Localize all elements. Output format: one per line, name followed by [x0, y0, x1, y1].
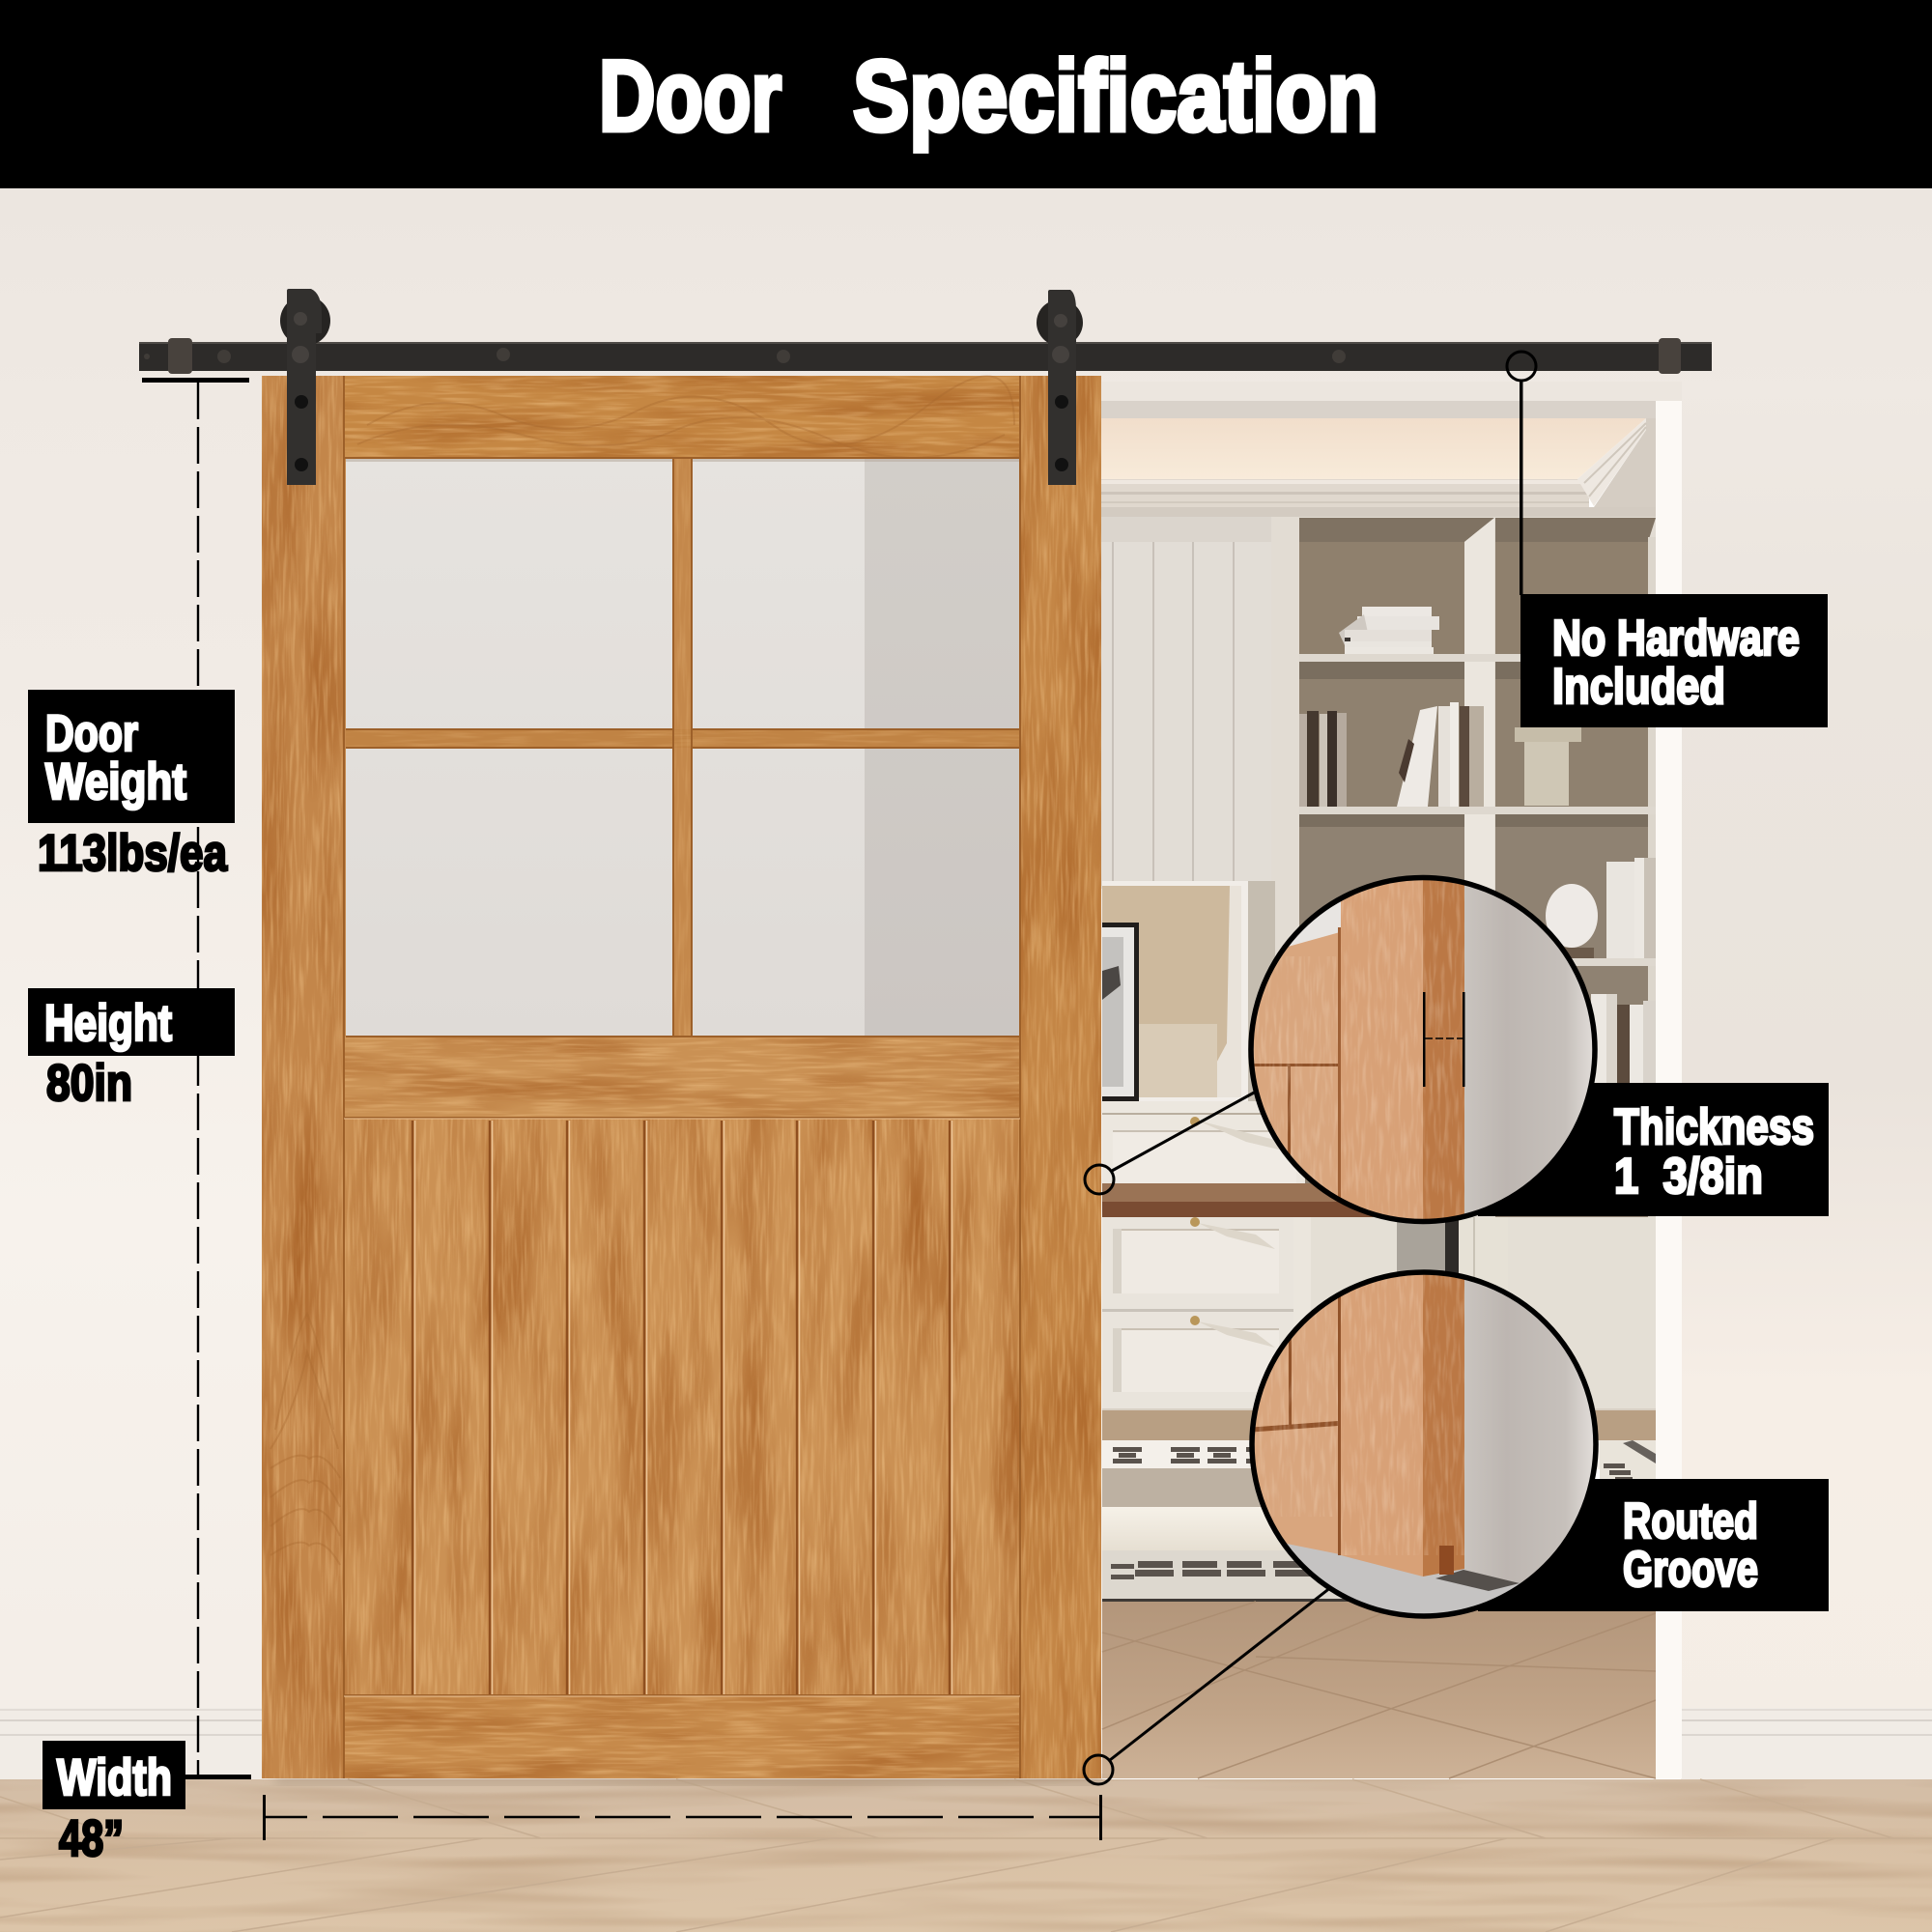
ceiling cove light: [1101, 418, 1646, 479]
small black frame: [1102, 923, 1139, 1101]
plank panels: [344, 1118, 1020, 1695]
thickness marks: [1423, 992, 1464, 1087]
leader: groove: [1084, 1587, 1331, 1784]
title text: Specification: [853, 41, 1378, 153]
label box: routed groove: [1478, 1479, 1829, 1611]
top rail: [344, 376, 1020, 458]
room seen through opening: [1101, 398, 1656, 1778]
label: door weight: Door: [45, 705, 138, 762]
wood floor: [0, 1779, 1932, 1932]
middle rail: [344, 1037, 1020, 1118]
label: height: Height: [44, 995, 172, 1052]
label: door weight: Weight: [45, 753, 186, 810]
title text: [599, 41, 1378, 153]
panelled wall: [1101, 517, 1275, 889]
bottom rail: [344, 1695, 1020, 1778]
label: no hardware included: Included: [1552, 659, 1725, 715]
right wall panels: [1293, 1217, 1656, 1410]
wooden desk top: [1102, 1183, 1373, 1217]
label: no hardware included: No Hardware: [1552, 611, 1800, 667]
left hanger strap: [280, 289, 330, 485]
barn door: [262, 376, 1101, 1784]
rail bolts: [144, 348, 1346, 363]
sliding track rail: [139, 338, 1712, 374]
header soffit: [1101, 398, 1656, 419]
label: width: [43, 1741, 185, 1809]
leader: thickness: [1085, 1092, 1256, 1194]
label text: routed groove: Routed: [1623, 1493, 1758, 1549]
label text: thickness: [1614, 1099, 1814, 1205]
shadow beside framed art: [1248, 881, 1275, 1101]
books and decor: [1299, 607, 1656, 1083]
label: width: Width: [57, 1749, 172, 1806]
value: door weight: 113lbs/ea: [38, 825, 227, 882]
right hanger strap: [1037, 290, 1083, 485]
wall opening right jamb: [1101, 382, 1682, 1778]
left stile: [262, 376, 344, 1778]
title banner: [0, 0, 1932, 188]
label text: thickness: 1 3/8in: [1614, 1149, 1763, 1205]
label: height: [28, 988, 235, 1056]
crown moulding: [1101, 418, 1656, 518]
right stile: [1020, 376, 1101, 1778]
glass mullions: [346, 458, 1020, 1037]
end stops: [168, 338, 192, 374]
label text: routed groove: [1623, 1493, 1758, 1598]
detail circle: thickness: [1246, 869, 1605, 1227]
title text: Door: [599, 41, 781, 153]
glass panes: [346, 458, 1020, 1037]
room floor and rug: [1102, 1408, 1656, 1778]
detail circle: routed groove: [1246, 1265, 1605, 1633]
height dimension line: [142, 378, 251, 1779]
framed art: [1102, 881, 1248, 1101]
shelf backs: [1299, 518, 1656, 1219]
label: no hardware included: [1520, 594, 1828, 727]
width dimension line: [263, 1795, 1102, 1840]
bookshelf frame: [1271, 517, 1656, 1222]
cabinet: [1102, 1101, 1305, 1410]
label box: thickness: [1478, 1083, 1829, 1216]
value: height: 80in: [46, 1055, 132, 1112]
label: door weight: [28, 690, 235, 823]
label text: thickness: Thickness: [1614, 1099, 1814, 1155]
leader: no hardware: [1507, 352, 1536, 595]
label text: routed groove: Groove: [1623, 1542, 1758, 1598]
value: width: 48”: [59, 1810, 124, 1867]
